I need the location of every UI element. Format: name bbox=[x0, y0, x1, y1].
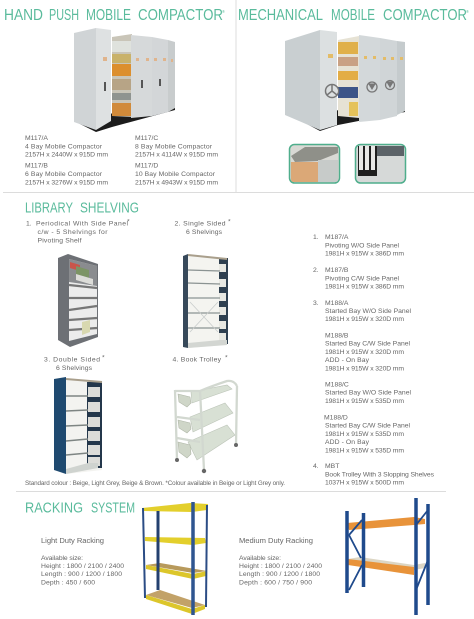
light duty text: Depth : 450 / 600 bbox=[41, 579, 95, 586]
heading: racking system bbox=[25, 500, 135, 516]
model 3 C: 1981H x 915W x 535D mm bbox=[325, 398, 404, 405]
illustration: light duty rack bbox=[142, 502, 208, 615]
illustration: single sided shelf bbox=[183, 254, 228, 348]
specs: M117/B: 6 Bay Mobile Compactor bbox=[25, 171, 103, 178]
model 3 D: Started Bay C/W Side Panel bbox=[325, 423, 410, 430]
medium duty text bbox=[239, 536, 322, 586]
heading: library shelving: SHELVING bbox=[80, 200, 139, 216]
item label 3: 6 Shelvings bbox=[56, 365, 93, 372]
item label 3 bbox=[44, 354, 105, 372]
heading: library shelving: LIBRARY bbox=[25, 200, 73, 216]
heading: racking system: RACKING bbox=[25, 500, 83, 516]
panel: mechanical mobile compactor bbox=[238, 7, 469, 183]
item label 1: Periodical With Side Panel bbox=[36, 220, 128, 228]
light duty text: Light Duty Racking bbox=[41, 536, 104, 545]
model 3 A: 1981H x 915W x 320D mm bbox=[325, 316, 404, 323]
item label 1: c/w - 5 Shelvings for bbox=[38, 229, 108, 236]
note: standard colour: Standard colour : Beige, Light Grey, Beige & Brown. *Colour available in Beige or Light Grey only. bbox=[25, 480, 285, 487]
model 3 C: Started Bay W/O Side Panel bbox=[325, 390, 411, 397]
illustration: periodical shelf bbox=[58, 254, 98, 347]
panel: library shelving bbox=[25, 200, 285, 487]
specs: M117/D: 10 Bay Mobile Compactor bbox=[135, 171, 216, 178]
heading: hand push: MOBILE bbox=[86, 7, 131, 24]
specs: M117/C: M117/C bbox=[135, 135, 158, 142]
heading: hand push: ® bbox=[222, 9, 225, 14]
heading: hand push: COMPACTOR bbox=[138, 7, 223, 24]
medium duty text: Available size: bbox=[239, 555, 281, 562]
specs: M117/A bbox=[25, 135, 108, 158]
item label 1 bbox=[26, 218, 130, 244]
model 3 D: 1981H x 915W x 535D mm bbox=[325, 431, 404, 438]
model 3 B: Started Bay C/W Side Panel bbox=[325, 341, 410, 348]
model 4: 4. bbox=[313, 463, 319, 470]
light duty text: Length : 900 / 1200 / 1800 bbox=[41, 571, 122, 578]
model 3 B: ADD - On Bay bbox=[325, 357, 370, 364]
specs: M117/A: 4 Bay Mobile Compactor bbox=[25, 143, 103, 150]
model 3 A: Started Bay W/O Side Panel bbox=[325, 308, 411, 315]
model 3 B bbox=[325, 332, 410, 372]
model 3 D: 1981H x 915W x 535D mm bbox=[325, 447, 404, 454]
light duty text bbox=[41, 536, 124, 586]
item label 2 bbox=[174, 218, 231, 236]
item label 4: * bbox=[225, 354, 228, 362]
heading: mechanical bbox=[238, 7, 469, 24]
illustration: book trolley bbox=[175, 381, 238, 473]
heading: mechanical: MECHANICAL bbox=[238, 7, 323, 24]
model 1: M187/A bbox=[325, 234, 349, 241]
heading: library shelving bbox=[25, 200, 139, 216]
item label 1: Pivoting Shelf bbox=[38, 238, 82, 244]
specs: M117/D: 2157H x 4943W x 915D mm bbox=[135, 180, 218, 186]
heading: hand push bbox=[4, 7, 225, 24]
specs: M117/A: M117/A bbox=[25, 135, 48, 142]
specs: M117/C bbox=[135, 135, 218, 158]
model 2 bbox=[313, 267, 404, 290]
model 4: Book Trolley With 3 Slopping Shelves bbox=[325, 471, 435, 478]
model 3 C: M188/C bbox=[325, 382, 349, 388]
model 1: 1. bbox=[313, 234, 319, 241]
specs: M117/B: M117/B bbox=[25, 162, 48, 170]
illustration: mechanical compactor bbox=[285, 30, 405, 131]
model 3 B: 1981H x 915W x 320D mm bbox=[325, 349, 404, 356]
item label 2: 2. Single Sided bbox=[174, 220, 226, 228]
medium duty text: Depth : 600 / 750 / 900 bbox=[239, 579, 312, 586]
model 4: 1037H x 915W x 500D mm bbox=[325, 480, 404, 486]
specs: M117/D: M117/D bbox=[135, 162, 158, 170]
item label 4: 4. Book Trolley bbox=[172, 356, 222, 364]
illustration: hand push compactor bbox=[74, 28, 175, 132]
model 1: 1981H x 915W x 386D mm bbox=[325, 250, 404, 258]
model 3 D bbox=[324, 414, 410, 454]
model 1 bbox=[313, 234, 404, 258]
item label 3: * bbox=[102, 354, 105, 362]
medium duty text: Medium Duty Racking bbox=[239, 536, 313, 545]
heading: hand push: PUSH bbox=[49, 7, 79, 24]
detail photo: rail bbox=[290, 144, 340, 183]
model 3 A bbox=[313, 300, 411, 323]
panel: shelving model list bbox=[313, 234, 435, 486]
item label 1: 1. bbox=[26, 220, 32, 228]
detail photo: files bbox=[356, 144, 406, 183]
panel: hand push mobile compactor bbox=[4, 7, 225, 186]
item label 2: * bbox=[228, 218, 231, 226]
specs: M117/A: 2157H x 2440W x 915D mm bbox=[25, 152, 108, 158]
heading: mechanical: MOBILE bbox=[331, 7, 375, 24]
model 2: Pivoting C/W Side Panel bbox=[325, 275, 399, 282]
model 2: 1981H x 915W x 386D mm bbox=[325, 284, 404, 290]
light duty text: Available size: bbox=[41, 555, 83, 562]
specs: M117/B bbox=[25, 162, 108, 186]
item label 2: 6 Shelvings bbox=[186, 229, 223, 236]
model 3 A: M188/A bbox=[325, 300, 349, 307]
medium duty text: Length : 900 / 1200 / 1800 bbox=[239, 571, 320, 578]
model 3 A: 3. bbox=[313, 300, 319, 307]
model 2: 2. bbox=[313, 267, 319, 274]
model 1: Pivoting W/O Side Panel bbox=[325, 242, 399, 249]
heading: mechanical: ® bbox=[466, 9, 469, 14]
specs: M117/D bbox=[135, 162, 218, 186]
heading: racking system: SYSTEM bbox=[91, 500, 135, 516]
specs: M117/C: 8 Bay Mobile Compactor bbox=[135, 143, 213, 150]
medium duty text: Height : 1800 / 2100 / 2400 bbox=[239, 563, 322, 570]
model 3 B: 1981H x 915W x 320D mm bbox=[325, 365, 404, 372]
item label 4 bbox=[172, 354, 228, 364]
specs: M117/C: 2157H x 4114W x 915D mm bbox=[135, 152, 218, 158]
light duty text: Height : 1800 / 2100 / 2400 bbox=[41, 563, 124, 570]
illustration: medium duty rack bbox=[347, 498, 428, 615]
illustration: double sided shelf bbox=[54, 377, 102, 474]
model 3 C bbox=[325, 382, 411, 405]
item label 3: 3. Double Sided bbox=[44, 356, 100, 364]
item label 1: * bbox=[127, 218, 130, 226]
model 3 D: ADD - On Bay bbox=[325, 439, 370, 446]
model 4: MBT bbox=[325, 463, 339, 470]
model 3 B: M188/B bbox=[325, 332, 349, 340]
panel: racking system bbox=[25, 498, 428, 615]
model 2: M187/B bbox=[325, 267, 349, 274]
model 3 D: M188/D bbox=[324, 414, 348, 422]
specs: M117/B: 2157H x 3276W x 915D mm bbox=[25, 180, 108, 186]
model 4 bbox=[313, 463, 435, 486]
heading: hand push: HAND bbox=[4, 7, 43, 24]
